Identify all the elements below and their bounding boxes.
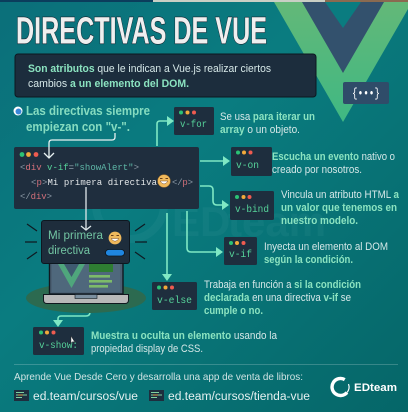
icon: course — [14, 390, 29, 401]
description: v-if — [264, 241, 388, 266]
card: v-for: v-for — [180, 119, 207, 131]
description: v-if: Inyecta un elemento al DOM — [264, 241, 388, 253]
description: v-else: declarada en una directiva v-if se — [204, 292, 351, 304]
footer text: Aprende Vue Desde Cero y desarrolla una app de venta de libros: — [14, 371, 303, 383]
icon: emoji in code — [158, 175, 170, 187]
note: directives prefix: empiezan con "v-". — [26, 120, 130, 134]
card: v-for — [174, 107, 214, 135]
laptop screen — [50, 262, 123, 294]
description: v-for: array o un objeto. — [220, 124, 300, 136]
alert rays — [25, 224, 147, 259]
arrow: to v-for — [157, 121, 168, 146]
description: v-bind — [281, 189, 400, 227]
arrow: note to code — [44, 133, 115, 158]
description: v-else: Trabaja en función a si la condición — [204, 279, 361, 291]
description: v-show — [91, 330, 278, 355]
alert popup: directiva — [48, 245, 91, 257]
description: v-bind: Vincula un atributo HTML a — [281, 189, 400, 201]
top screenshot strip — [0, 0, 408, 2]
watermark: ED — [172, 198, 230, 245]
badge: curly braces: {•••} — [352, 86, 380, 101]
description: v-on — [272, 151, 395, 176]
description: v-on: Escucha un evento nativo o — [272, 151, 395, 163]
card: v-show: v-show: — [39, 340, 78, 352]
card: v-bind — [230, 191, 274, 220]
description: v-bind: un valor que tenemos en — [281, 202, 397, 214]
alert button — [106, 250, 124, 256]
description: v-if: según la condición. — [264, 254, 353, 266]
link text: ed.team/cursos/tienda-vue — [168, 391, 310, 403]
watermark — [96, 171, 326, 245]
description: v-bind: nuestro modelo. — [281, 215, 358, 227]
code line 3: </div> — [20, 192, 52, 202]
description: v-on: creado por nosotros. — [272, 164, 362, 176]
card: v-else — [152, 282, 197, 310]
code line 2: <p>Mi primera directiva — [31, 178, 158, 188]
note text: Las directivas siempre — [26, 104, 150, 118]
arrow: code to alert — [81, 187, 91, 230]
definition line 1: Son atributos que le indican a Vue.js realizar ciertos — [28, 63, 271, 75]
arrow: to v-if — [187, 211, 217, 252]
icon: bullet — [14, 106, 22, 116]
logo: EDteam — [332, 378, 397, 395]
link: vue course — [14, 390, 138, 403]
icon: mouse cursor — [71, 336, 75, 343]
vue logo — [274, 2, 408, 122]
card: v-if — [224, 237, 257, 265]
icon: course — [149, 390, 164, 401]
illustration: laptop with alert — [25, 187, 147, 313]
arrow: to v-show — [58, 306, 90, 321]
laptop base — [44, 294, 128, 304]
link text: ed.team/cursos/vue — [33, 391, 138, 403]
card: v-bind: v-bind — [235, 204, 269, 216]
code line 2 end: </p> — [172, 178, 193, 188]
window dots — [20, 152, 38, 157]
description: v-else — [204, 279, 361, 317]
arrow: to v-else — [166, 213, 168, 275]
description: v-show: propiedad display de CSS. — [91, 343, 203, 355]
description: v-for — [220, 111, 315, 136]
description: v-else: cumple o no. — [204, 305, 263, 317]
card: v-if: v-if — [229, 249, 252, 261]
badge: curly braces — [343, 82, 389, 104]
code line 1: <div v-if="showAlert"> — [20, 163, 139, 173]
definition line 2: cambios a un elemento del DOM. — [28, 78, 189, 90]
icon: emoji in alert — [109, 232, 121, 244]
card: v-show — [33, 327, 84, 355]
card: v-on: v-on — [236, 160, 259, 172]
card: v-else: v-else — [157, 295, 192, 307]
alert popup — [42, 220, 130, 264]
note: directives prefix — [14, 104, 150, 134]
link: tienda-vue course — [149, 390, 310, 403]
description: v-show: Muestra u oculta un elemento usando la — [91, 330, 278, 342]
watermark: team — [228, 198, 326, 245]
panel: definition — [15, 54, 316, 97]
shadow ellipse — [26, 283, 146, 313]
description: v-for: Se usa para iterar un — [220, 111, 315, 123]
title: DIRECTIVAS DE VUE — [16, 10, 267, 52]
arrow: to v-on — [200, 160, 224, 162]
alert text: Mi primera — [48, 230, 104, 242]
arrow: to v-bind — [200, 186, 223, 205]
card: v-on — [231, 147, 272, 176]
logo: EDteam: EDteam — [354, 382, 397, 394]
panel: code block — [14, 147, 199, 209]
